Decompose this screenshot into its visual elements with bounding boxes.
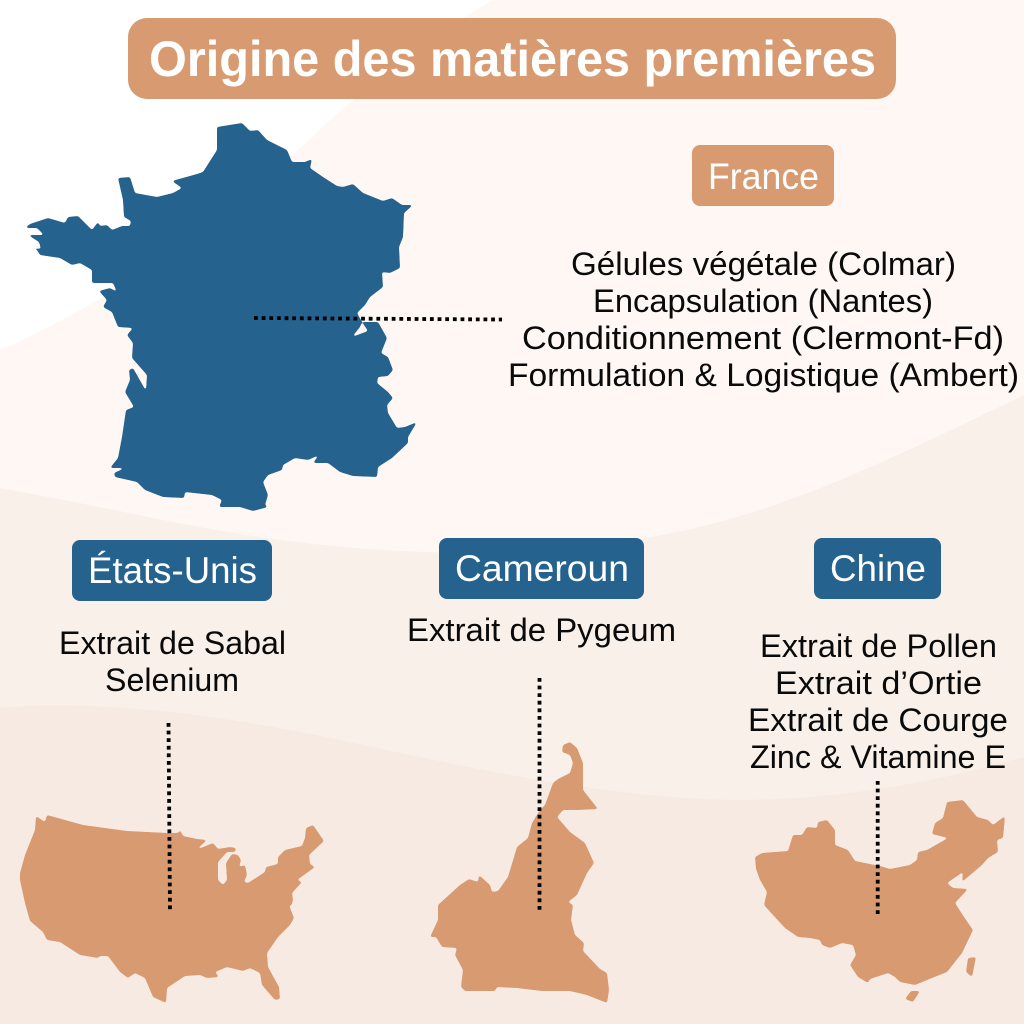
map: États-Unis (20, 815, 324, 1003)
label: États-Unis (72, 540, 272, 601)
label: Chine (814, 538, 941, 599)
panel: Cameroun (407, 538, 676, 1003)
list: France: Gélules végétale (Colmar) (571, 246, 956, 282)
map: Chine (755, 800, 1005, 1002)
label: Cameroun: Cameroun (455, 548, 629, 589)
list: Chine: Extrait de Courge (748, 702, 1008, 738)
label: Chine: Chine (830, 548, 926, 589)
label: France (692, 145, 834, 206)
dotted line: France (254, 318, 502, 320)
list: France (508, 246, 1019, 393)
list: Chine: Extrait de Pollen (760, 628, 997, 664)
title (128, 18, 896, 99)
panel: Chine (748, 538, 1008, 1002)
list: France: Formulation & Logistique (Ambert) (508, 357, 1019, 393)
dotted line: États-Unis (168, 723, 170, 910)
panel: États-Unis (20, 540, 324, 1003)
list: France: Encapsulation (Nantes) (593, 283, 933, 319)
list: États-Unis (59, 625, 286, 698)
list: France: Conditionnement (Clermont-Fd) (522, 320, 1004, 356)
title: Origine des matières premières (149, 31, 876, 87)
label: France: France (708, 156, 819, 197)
panel: France (508, 145, 1019, 393)
list: États-Unis: Extrait de Sabal (59, 625, 286, 661)
list: Chine: Extrait d’Ortie (775, 665, 982, 701)
list: Chine: Zinc & Vitamine E (750, 739, 1006, 775)
label: Cameroun (439, 538, 644, 599)
list: Chine (748, 628, 1008, 775)
dotted line: Cameroun (538, 678, 541, 910)
list: États-Unis: Selenium (105, 662, 239, 698)
map: France (25, 123, 417, 511)
list: Cameroun: Extrait de Pygeum (407, 612, 676, 648)
label: États-Unis: États-Unis (88, 550, 257, 591)
map: Cameroun (430, 742, 609, 1003)
dotted line: Chine (876, 781, 880, 914)
